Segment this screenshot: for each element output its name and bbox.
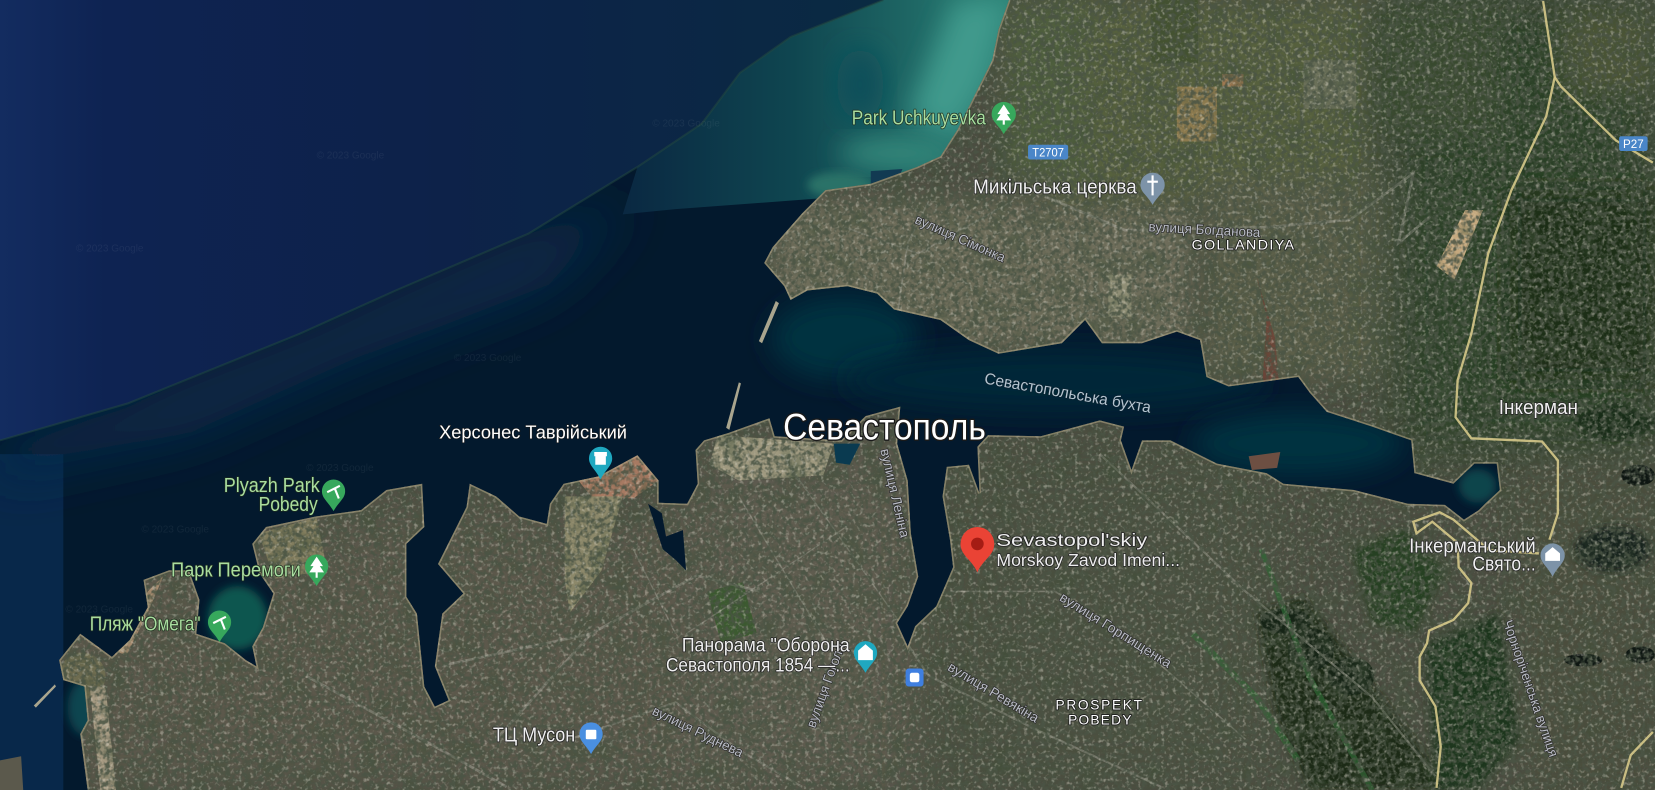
label: GOLLANDIYA: GOLLANDIYA <box>1192 237 1295 253</box>
road labels <box>650 212 1561 760</box>
road shield P27 <box>1619 136 1648 151</box>
road labels: вулиця Руднева <box>650 703 746 760</box>
water labels and copyright marks: © 2023 Google <box>76 243 144 254</box>
water labels and copyright marks: © 2023 Google <box>652 119 720 130</box>
label: Plyazh Park Pobedy with beach pin: Pobedy <box>259 494 318 516</box>
road labels: Чорноріченська вулиця <box>1500 618 1561 759</box>
label: Sevastopol'skiy Morskoy Zavod with red pin: Morskoy Zavod Imeni... <box>996 550 1180 570</box>
sea: turquoise shallows <box>0 0 1013 440</box>
water labels and copyright marks <box>65 119 720 616</box>
label: Sevastopol'skiy Morskoy Zavod with red pin <box>960 527 1180 572</box>
label: Інкерманський Свято... with church pin: Свято... <box>1472 553 1536 575</box>
label: Інкерманський Свято... with church pin: Інкерманський <box>1409 535 1536 557</box>
label: Панорама Оборона Севастополя with museum pin: Севастополя 1854 —... <box>666 656 850 677</box>
label: PROSPEKT POBEDY: POBEDY <box>1068 713 1131 728</box>
label: PROSPEKT POBEDY <box>1055 698 1143 728</box>
label: Park Uchkuyevka with park pin <box>852 102 1016 134</box>
label: Пляж "Омега" with beach pin <box>90 610 231 642</box>
label: Панорама Оборона Севастополя with museum pin <box>666 636 877 677</box>
label: Plyazh Park Pobedy with beach pin: Plyazh Park <box>224 475 321 497</box>
road shield P27: P27 <box>1623 138 1644 151</box>
water labels and copyright marks: © 2023 Google <box>454 353 522 364</box>
label: Панорама Оборона Севастополя with museum pin: Панорама "Оборона <box>682 636 850 657</box>
icon: metro station <box>906 669 924 686</box>
label: Микільська церква with church pin <box>973 173 1165 205</box>
label: ТЦ Мусон with shopping pin: ТЦ Мусон <box>493 724 575 746</box>
grey street network <box>306 173 1435 787</box>
label: Микільська церква with church pin: Микільська церква <box>973 176 1138 198</box>
water labels and copyright marks: © 2023 Google <box>141 524 209 535</box>
road labels: вулиця Леніна <box>877 447 912 539</box>
label: Plyazh Park Pobedy with beach pin <box>224 475 345 516</box>
label: PROSPEKT POBEDY: PROSPEKT <box>1055 698 1143 713</box>
small inlets and piers <box>0 301 1280 790</box>
water labels and copyright marks: © 2023 Google <box>306 463 374 474</box>
label: Парк Перемоги with park pin: Парк Перемоги <box>171 560 301 582</box>
road shield T2707: T2707 <box>1032 146 1064 159</box>
label: Севастопольська бухта: Севастопольська бухта <box>983 371 1152 417</box>
road labels: вулиця Гоголя <box>804 641 848 730</box>
label: Херсонес Таврійський with teal pin <box>439 421 627 479</box>
city label: Севастополь: Севастополь <box>783 406 986 447</box>
sea: deep blue open water <box>0 0 883 440</box>
label: ТЦ Мусон with shopping pin <box>493 722 603 754</box>
main yellow roads <box>1413 1 1653 788</box>
forest and valley patches <box>1193 406 1655 790</box>
label: Парк Перемоги with park pin <box>171 554 328 586</box>
label: Інкерманський Свято... with church pin <box>1409 535 1565 577</box>
road labels: вулиця Горпищенка <box>1057 590 1175 671</box>
label: Інкерман: Інкерман <box>1499 397 1578 419</box>
label: Пляж "Омега" with beach pin: Пляж "Омега" <box>90 614 201 636</box>
road labels: вулиця Сімонка <box>913 212 1008 265</box>
label: Херсонес Таврійський with teal pin: Херсонес Таврійський <box>439 421 627 442</box>
label: Park Uchkuyevka with park pin: Park Uchkuyevka <box>852 108 987 130</box>
water labels and copyright marks: © 2023 Google <box>317 150 385 161</box>
road labels: вулиця Ревякіна <box>945 659 1042 726</box>
road labels: вулиця Богданова <box>1148 219 1261 240</box>
label: Sevastopol'skiy Morskoy Zavod with red pin: Sevastopol'skiy <box>996 530 1147 550</box>
water labels and copyright marks: © 2023 Google <box>65 605 133 616</box>
